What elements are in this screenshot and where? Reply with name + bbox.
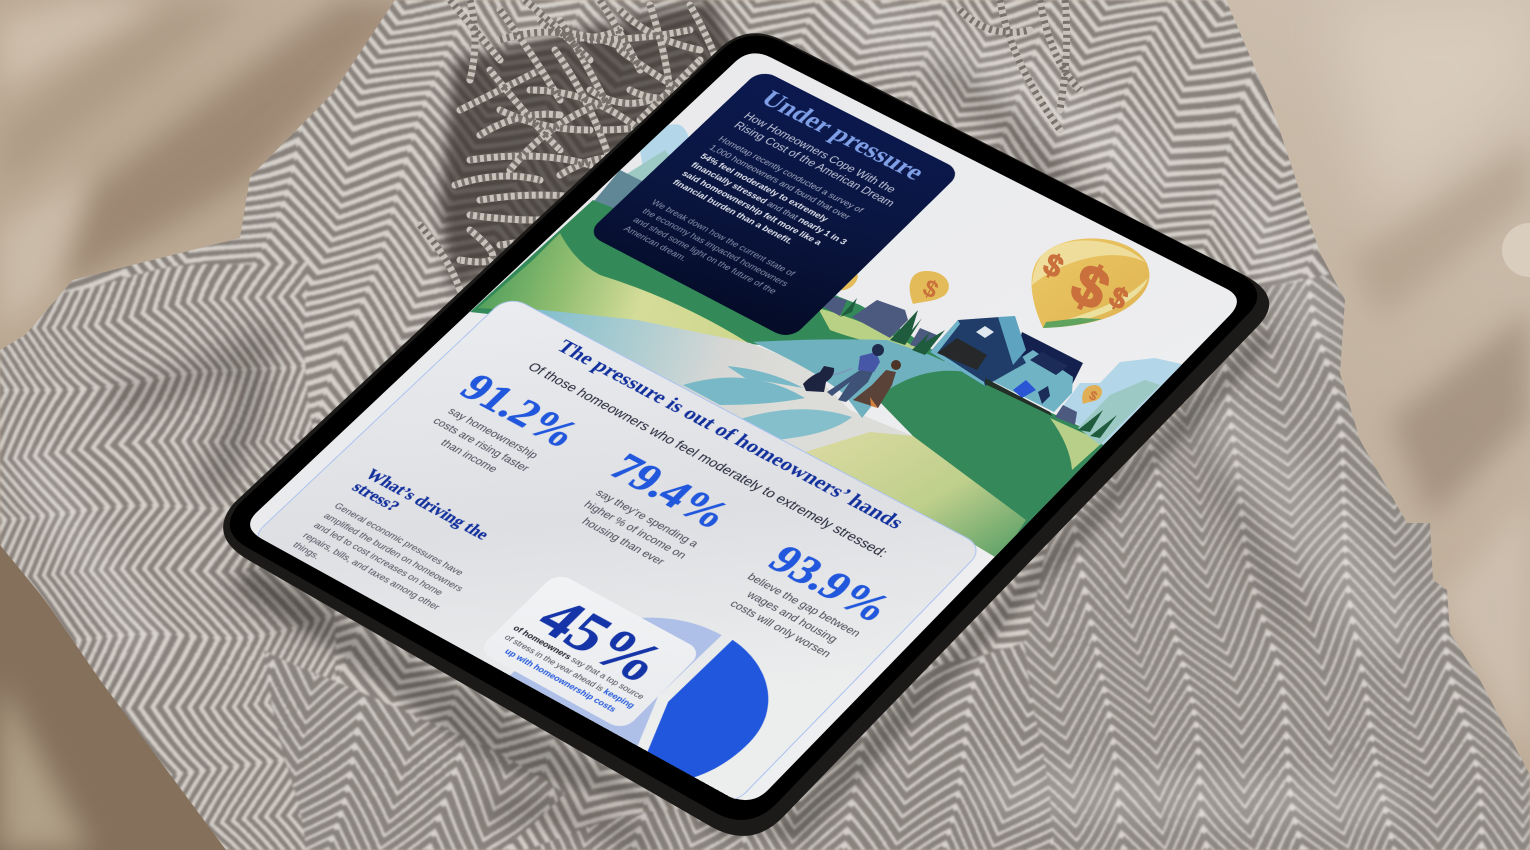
- intro paragraph one: said homeownership felt more like a: [680, 169, 824, 247]
- stat 93.9% label: wages and housing: [744, 589, 840, 645]
- stat 79.4% label: housing than ever: [579, 516, 667, 568]
- stat 93.9% label: [727, 572, 863, 660]
- scenery: buildings: [820, 295, 1077, 425]
- backdrop knob: [1502, 223, 1530, 277]
- heading: what's driving the stress: What’s driving the: [362, 465, 493, 543]
- panel: pressure stats: [250, 296, 984, 806]
- tablet drop shadow: [240, 330, 1275, 842]
- stat 93.9%: 93.9%: [759, 538, 901, 631]
- paragraph: economic pressures: things.: [290, 541, 322, 561]
- gold balloon large: [1032, 238, 1149, 328]
- intro subtitle: How Homeowners Cope With the: [741, 111, 898, 195]
- heading: what's driving the stress: stress?: [348, 478, 404, 515]
- gold balloon large: $: [1061, 251, 1119, 323]
- intro paragraph two: and shed some light on the future of the: [631, 216, 779, 296]
- section heading: The pressure is out of homeowners’ hands: [552, 336, 909, 533]
- intro subtitle: Rising Cost of the American Dream: [731, 121, 896, 209]
- scenery: light grass on back hill: [478, 233, 750, 344]
- paragraph: economic pressures: General economic pressures have: [332, 501, 466, 577]
- intro paragraph one: financial burden than a benefit.: [671, 178, 795, 245]
- stat 93.9% label: believe the gap between: [744, 572, 863, 639]
- tablet screen content: [257, 74, 977, 800]
- scenery: cypress trees: [840, 298, 1117, 438]
- stat 91.2% label: costs are rising faster: [430, 416, 531, 474]
- stat 91.2% label: than income: [438, 438, 500, 475]
- scenery: distant blue shapes: [594, 124, 838, 296]
- intro paragraph one: 1,000 homeowners and found that over: [707, 143, 852, 221]
- gold balloon large: $: [1038, 246, 1069, 285]
- callout number: 45%: [524, 586, 681, 694]
- intro paragraph one: [671, 135, 865, 247]
- scenery: front grass: [805, 432, 1026, 560]
- panel: intro: [586, 69, 962, 340]
- intro paragraph two: the economy has impacted homeowners: [640, 207, 791, 288]
- stat 79.4% label: higher % of income on: [581, 499, 689, 561]
- scenery: back hill: [470, 200, 950, 362]
- stat 79.4%: 79.4%: [599, 446, 740, 537]
- callout text: of homeowners say that a top source: [511, 623, 647, 701]
- intro title: Under pressure: [755, 86, 931, 185]
- house: [930, 316, 1083, 416]
- stat 93.9% label: costs will only worsen: [727, 598, 833, 660]
- paragraph: economic pressures: repairs, bills, and taxes among other: [301, 531, 442, 612]
- intro paragraph two: American dream.: [622, 224, 689, 263]
- callout text: up with homeownership costs: [503, 646, 619, 714]
- paragraph: economic pressures: and led to cost increases on home: [311, 521, 445, 597]
- scenery: road and river: [536, 310, 962, 452]
- gold balloon small behind panel: [840, 274, 858, 290]
- screen and illustration: [250, 53, 1237, 800]
- stat 79.4% label: [579, 488, 701, 568]
- intro paragraph two: We break down how the current state of: [649, 198, 797, 278]
- tangled fabric fringe: [420, 0, 1080, 290]
- gold balloon large: $: [1104, 281, 1133, 317]
- people and dog: [803, 344, 901, 408]
- intro paragraph one: Hometap recently conducted a survey of: [716, 135, 865, 214]
- callout text: of stress in the year ahead is keeping: [502, 632, 637, 710]
- gold balloon medium: [910, 271, 949, 305]
- paragraph: economic pressures: amplified the burden on homeowners: [322, 511, 466, 593]
- tablet body: [223, 33, 1269, 836]
- callout: 45 percent: [477, 572, 703, 731]
- gold balloon small right: [1082, 385, 1102, 404]
- stat 91.2% label: say homeownership: [445, 406, 540, 461]
- scenery: front hill: [881, 370, 1108, 550]
- paragraph: economic pressures: [290, 501, 466, 612]
- section subheading: Of those homeowners who feel moderately to extremely stressed:: [525, 360, 891, 560]
- pie chart: 45 percent: [510, 618, 769, 778]
- scenery: right blue hills: [1060, 358, 1190, 445]
- gold balloon medium: $: [918, 274, 943, 305]
- intro paragraph one: 54% feel moderately to extremely: [698, 152, 831, 223]
- stat 91.2%: 91.2%: [450, 367, 590, 456]
- stat 79.4% label: say they’re spending a: [593, 488, 701, 550]
- intro paragraph one: financially stressed and that nearly 1 in 3: [689, 161, 849, 246]
- gold balloon small right: $: [1087, 387, 1101, 404]
